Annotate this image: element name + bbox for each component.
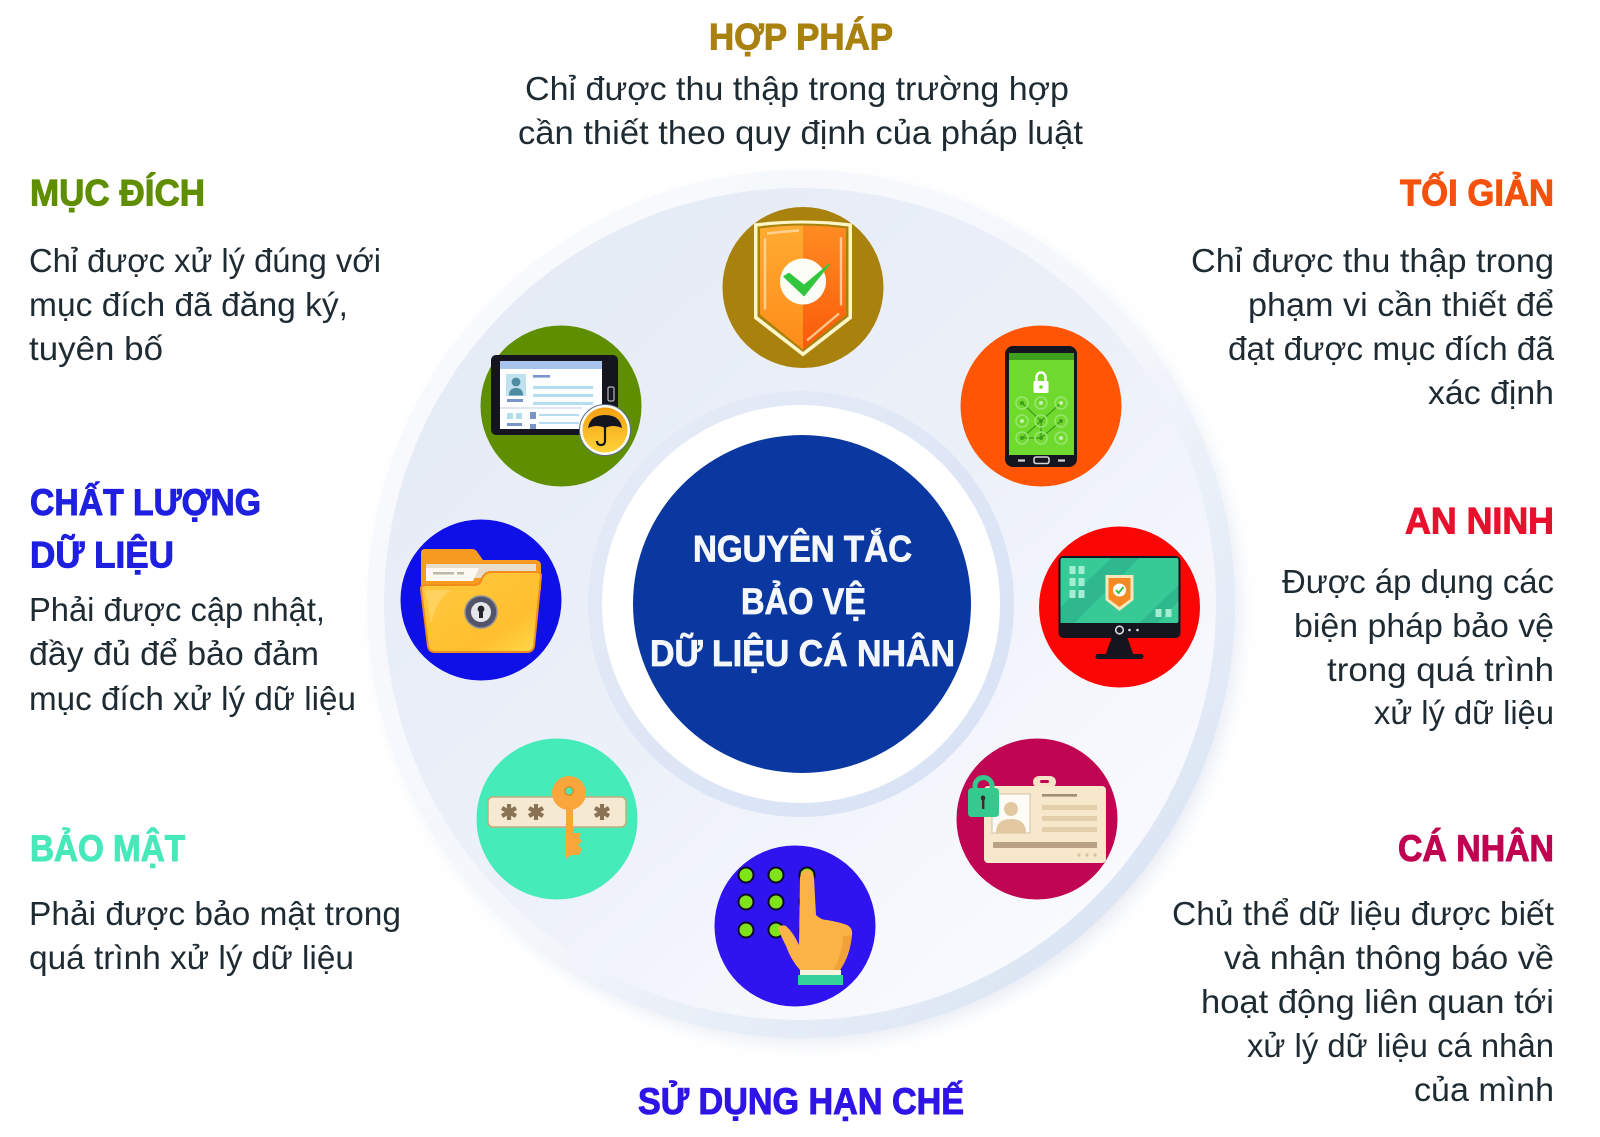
- center circle: title: [633, 435, 971, 773]
- text block: Tối giản description: xác định: [1428, 375, 1554, 412]
- heading: Bảo mật: BẢO MẬT: [30, 827, 185, 869]
- text block: Chất lượng dữ liệu description: Phải được cập nhật,: [29, 592, 325, 629]
- text block: Hợp pháp description: Chỉ được thu thập trong trường hợp: [525, 71, 1069, 108]
- icon: monitor with shield: [1039, 526, 1200, 688]
- heading: Sử dụng hạn chế: SỬ DỤNG HẠN CHẾ: [638, 1080, 964, 1122]
- text block: Tối giản description: Chỉ được thu thập trong: [1191, 243, 1554, 280]
- heading: Chất lượng dữ liệu: CHẤT LƯỢNG: [30, 482, 261, 523]
- center circle: title: NGUYÊN TẮC: [693, 528, 912, 570]
- text block: Mục đích description: [29, 243, 381, 368]
- text block: Cá nhân description: [1172, 896, 1555, 1109]
- icon: tablet with umbrella badge: [480, 326, 642, 486]
- text block: Cá nhân description: Chủ thể dữ liệu được biết: [1172, 896, 1555, 933]
- icon: shield with check: [722, 207, 884, 368]
- text block: Chất lượng dữ liệu description: [29, 592, 356, 718]
- heading: Tối giản: TỐI GIẢN: [1400, 172, 1554, 214]
- wheel background: [367, 170, 1239, 1043]
- text block: Bảo mật description: Phải được bảo mật trong: [29, 896, 401, 933]
- icon: ID card with padlock: [956, 738, 1118, 900]
- icon: keypad with hand: [714, 846, 876, 1006]
- text block: Tối giản description: [1191, 243, 1554, 412]
- heading: Cá nhân: CÁ NHÂN: [1398, 827, 1554, 869]
- text block: An ninh description: Được áp dụng các: [1282, 564, 1554, 601]
- text block: Tối giản description: đạt được mục đích đã: [1228, 331, 1554, 368]
- text block: An ninh description: xử lý dữ liệu: [1374, 695, 1554, 732]
- text block: Hợp pháp description: cần thiết theo quy định của pháp luật: [518, 115, 1084, 152]
- text block: Bảo mật description: quá trình xử lý dữ liệu: [29, 940, 354, 977]
- text block: An ninh description: biện pháp bảo vệ: [1294, 608, 1554, 645]
- heading: Chất lượng dữ liệu: [30, 482, 261, 576]
- center circle: title: BẢO VỆ: [741, 580, 866, 622]
- icon: locked folder: [400, 520, 562, 680]
- text block: An ninh description: trong quá trình: [1327, 652, 1554, 689]
- text block: Mục đích description: mục đích đã đăng ký,: [29, 287, 348, 324]
- heading: Mục đích: MỤC ĐÍCH: [30, 172, 205, 214]
- text block: An ninh description: [1282, 564, 1554, 732]
- heading: Hợp pháp: HỢP PHÁP: [709, 16, 893, 58]
- heading: An ninh: AN NINH: [1405, 500, 1554, 542]
- text block: Mục đích description: Chỉ được xử lý đúng với: [29, 243, 381, 280]
- text block: Bảo mật description: [29, 896, 401, 977]
- text block: Hợp pháp description: [518, 71, 1084, 152]
- text block: Cá nhân description: và nhận thông báo về: [1224, 940, 1554, 977]
- text block: Chất lượng dữ liệu description: đầy đủ để bảo đảm: [29, 636, 319, 673]
- icon: phone with lock pattern: [960, 326, 1122, 486]
- text block: Tối giản description: phạm vi cần thiết để: [1248, 287, 1554, 324]
- icon: password bar with key: [476, 738, 638, 900]
- text block: Mục đích description: tuyên bố: [29, 331, 163, 368]
- center circle: title: DỮ LIỆU CÁ NHÂN: [650, 632, 955, 674]
- heading: Chất lượng dữ liệu: DỮ LIỆU: [30, 534, 174, 576]
- text block: Cá nhân description: xử lý dữ liệu cá nhân: [1247, 1028, 1554, 1065]
- text block: Cá nhân description: hoạt động liên quan tới: [1201, 984, 1554, 1021]
- text block: Cá nhân description: của mình: [1414, 1072, 1554, 1109]
- text block: Chất lượng dữ liệu description: mục đích xử lý dữ liệu: [29, 681, 356, 718]
